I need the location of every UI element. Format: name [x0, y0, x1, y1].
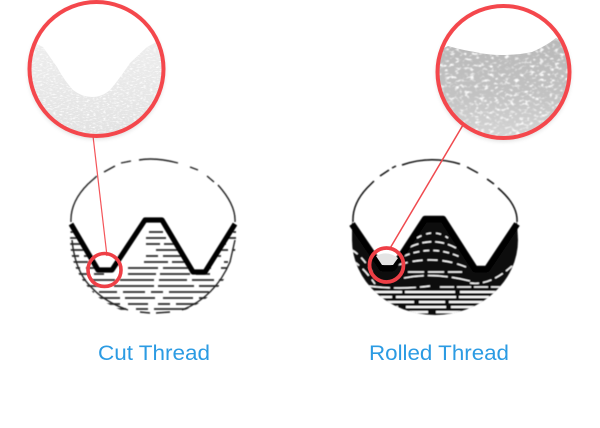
lens: magnified cut grain texture: [32, 42, 162, 134]
rolled thread: profile line: [352, 219, 517, 269]
rolled thread: leader line: [389, 125, 463, 250]
rolled thread: compressed grain lines: [350, 215, 520, 315]
cut thread: leader line: [93, 136, 107, 256]
cut thread: small focus ring: [88, 254, 121, 286]
lens shadow: [436, 7, 570, 141]
lens ring: [30, 2, 164, 136]
rolled thread: magnified lens: [436, 6, 572, 141]
rolled thread: cross-section diagram: [350, 160, 520, 315]
rolled thread: small focus ring: [370, 248, 404, 282]
label: cut thread: Cut Thread: [98, 341, 210, 365]
cut thread: cross-section diagram: [70, 159, 236, 313]
cut thread: straight grain hatch lines: [70, 232, 236, 309]
rolled thread: ring highlight: [376, 253, 398, 265]
label: rolled thread: Rolled Thread: [369, 341, 509, 365]
lens ring: [438, 6, 570, 138]
rolled thread: outline arc (dashed): [353, 160, 517, 222]
cut thread: outline arc (dashed): [71, 159, 235, 313]
cut thread: profile line: [71, 220, 235, 272]
lens: magnified rolled grain texture: [436, 38, 572, 140]
lens shadow: [28, 3, 164, 139]
cut thread: magnified lens: [28, 2, 168, 140]
infographic: cut thread vs rolled thread: [27, 0, 572, 360]
